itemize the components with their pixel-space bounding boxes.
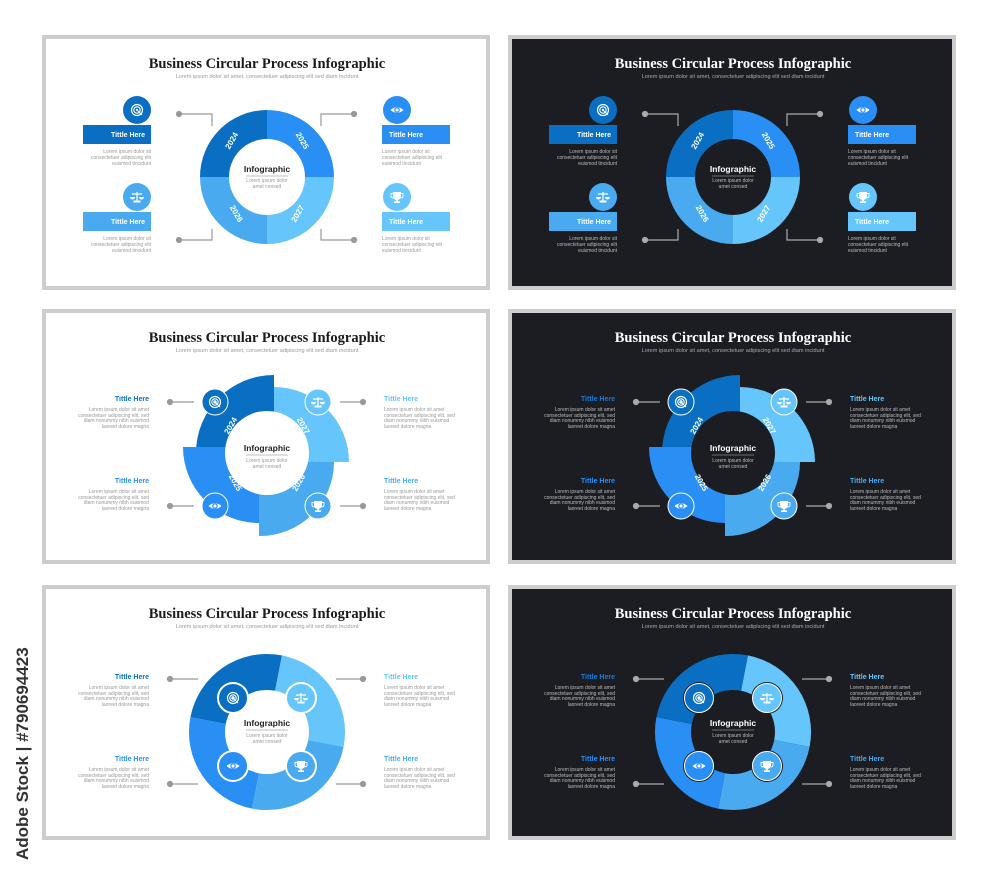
panel: light version 1 — [44, 37, 488, 288]
text: bottom right: Tittle Here — [850, 478, 884, 485]
text: top right: diam nonummy nibh euismod — [850, 418, 916, 424]
ring chart: Infographic — [710, 718, 756, 728]
ring chart: Lorem ipsum dolor — [712, 733, 754, 739]
text: top right: Tittle Here — [384, 396, 418, 403]
text: bottom left: Tittle Here — [581, 756, 615, 763]
item: top left: consectetuer adipiscing elit — [91, 155, 152, 161]
text: bottom left: laoreet dolore magna — [102, 784, 149, 790]
donut chart: 2025 — [294, 131, 311, 151]
text: top left: Lorem ipsum dolor sit amet — [89, 685, 150, 691]
text: top right: diam nonummy nibh euismod — [850, 696, 916, 702]
text: top right — [850, 674, 921, 708]
text: bottom left: Lorem ipsum dolor sit amet — [89, 767, 150, 773]
item: top right — [382, 96, 450, 167]
subtitle: Lorem ipsum dolor sit amet, consectetuer adipiscing elit sed diam incidunt — [642, 624, 825, 630]
item: bottom right: consectetuer adipiscing elit — [382, 242, 443, 248]
text: bottom left — [544, 756, 616, 790]
text: bottom left: diam nonummy nibh euismod — [550, 778, 615, 784]
text: bottom right: laoreet dolore magna — [850, 506, 897, 512]
donut chart: 2026 — [228, 204, 245, 224]
text: top right — [850, 396, 921, 430]
panel: dark version 1 — [510, 37, 954, 288]
ring chart: Lorem ipsum dolor — [246, 733, 288, 739]
text: bottom right: laoreet dolore magna — [384, 506, 431, 512]
text: top right: laoreet dolore magna — [384, 424, 431, 430]
connectors — [642, 112, 822, 242]
text: bottom left — [78, 478, 150, 512]
item: top right: consectetuer adipiscing elit — [848, 155, 909, 161]
text: bottom left: diam nonummy nibh euismod — [84, 500, 149, 506]
text: bottom right — [384, 756, 455, 790]
text: top right: consectetuer adipiscing elit, sed — [384, 413, 455, 419]
donut chart: amet consed — [253, 184, 282, 190]
text: top right: diam nonummy nibh euismod — [384, 696, 450, 702]
text: bottom right: consectetuer adipiscing elit, sed — [384, 495, 455, 501]
pinwheel chart: 2027 — [295, 416, 312, 436]
text: bottom right: Tittle Here — [850, 756, 884, 763]
subtitle: Lorem ipsum dolor sit amet, consectetuer adipiscing elit sed diam incidunt — [176, 348, 359, 354]
pinwheel chart: amet consed — [719, 464, 748, 470]
item: bottom right: Lorem ipsum dolor sit — [382, 236, 430, 242]
item: top right: Tittle Here — [855, 132, 889, 139]
text: top left: laoreet dolore magna — [102, 702, 149, 708]
text: bottom left: Tittle Here — [115, 478, 149, 485]
donut chart: 2025 — [760, 131, 777, 151]
item: bottom right: Lorem ipsum dolor sit — [848, 236, 896, 242]
item: top right: Lorem ipsum dolor sit — [382, 149, 430, 155]
text: bottom left: consectetuer adipiscing elit, sed — [544, 773, 615, 779]
text: top right: laoreet dolore magna — [850, 424, 897, 430]
item: bottom right: euismod tincidunt — [382, 248, 422, 254]
text: top left — [544, 674, 616, 708]
text: top right: Lorem ipsum dolor sit amet — [850, 685, 911, 691]
text: bottom right: consectetuer adipiscing elit, sed — [850, 773, 921, 779]
pinwheel chart: amet consed — [253, 464, 282, 470]
text: bottom right: diam nonummy nibh euismod — [850, 500, 916, 506]
text: top right — [384, 396, 455, 430]
icon circles — [202, 389, 331, 519]
pinwheel chart: 2024 — [222, 415, 239, 436]
text: top right: consectetuer adipiscing elit, sed — [384, 691, 455, 697]
text: bottom left: diam nonummy nibh euismod — [84, 778, 149, 784]
text: top left: diam nonummy nibh euismod — [84, 418, 149, 424]
text: top left: laoreet dolore magna — [568, 424, 615, 430]
text: top left: consectetuer adipiscing elit, sed — [78, 691, 149, 697]
text: top left — [78, 396, 150, 430]
item: bottom right — [382, 183, 450, 254]
text: bottom right: diam nonummy nibh euismod — [384, 500, 450, 506]
text: bottom right: Lorem ipsum dolor sit amet — [384, 767, 445, 773]
text: top left: Lorem ipsum dolor sit amet — [555, 407, 616, 413]
text: top left: laoreet dolore magna — [568, 702, 615, 708]
text: top left: diam nonummy nibh euismod — [550, 418, 615, 424]
item: top left: Tittle Here — [577, 132, 611, 139]
title: Business Circular Process Infographic — [149, 56, 386, 72]
donut chart: 2024 — [223, 130, 240, 151]
pinwheel chart: Lorem ipsum dolor — [246, 458, 288, 464]
text: bottom right — [850, 756, 921, 790]
text: bottom left: laoreet dolore magna — [568, 784, 615, 790]
donut chart: 2027 — [755, 203, 772, 224]
text: bottom right: Tittle Here — [384, 478, 418, 485]
item: bottom left: Tittle Here — [577, 219, 611, 226]
panel: light version 3 — [44, 587, 488, 838]
text: bottom right: diam nonummy nibh euismod — [850, 778, 916, 784]
text: top left: Lorem ipsum dolor sit amet — [89, 407, 150, 413]
donut chart: Infographic — [244, 164, 290, 174]
item: top left: Tittle Here — [111, 132, 145, 139]
item: top right: Lorem ipsum dolor sit — [848, 149, 896, 155]
text: bottom left: Tittle Here — [115, 756, 149, 763]
text: top right: Tittle Here — [850, 396, 884, 403]
item: top left: consectetuer adipiscing elit — [557, 155, 618, 161]
item: bottom left — [83, 183, 152, 254]
text: bottom right: consectetuer adipiscing elit, sed — [384, 773, 455, 779]
ring chart — [189, 654, 345, 810]
text: top left: Tittle Here — [115, 674, 149, 681]
text: top right: Lorem ipsum dolor sit amet — [384, 407, 445, 413]
text: bottom left: consectetuer adipiscing elit, sed — [78, 495, 149, 501]
pinwheel chart — [649, 375, 815, 536]
text: top left: Lorem ipsum dolor sit amet — [555, 685, 616, 691]
text: bottom left: consectetuer adipiscing elit, sed — [544, 495, 615, 501]
donut chart: Infographic — [710, 164, 756, 174]
donut chart: Lorem ipsum dolor — [712, 178, 754, 184]
item: top left: euismod tincidunt — [112, 161, 152, 167]
text: bottom left: laoreet dolore magna — [102, 506, 149, 512]
pinwheel chart: 2026 — [290, 472, 307, 493]
subtitle: Lorem ipsum dolor sit amet, consectetuer adipiscing elit sed diam incidunt — [176, 74, 359, 80]
pinwheel chart: 2025 — [693, 473, 710, 493]
text: bottom right: Lorem ipsum dolor sit amet — [850, 767, 911, 773]
item: bottom right: consectetuer adipiscing elit — [848, 242, 909, 248]
text: bottom left: laoreet dolore magna — [568, 506, 615, 512]
text: top right: laoreet dolore magna — [850, 702, 897, 708]
connectors — [168, 676, 366, 786]
text: top right: diam nonummy nibh euismod — [384, 418, 450, 424]
text: bottom right: Lorem ipsum dolor sit amet — [384, 489, 445, 495]
donut chart: amet consed — [719, 184, 748, 190]
text: bottom right: Lorem ipsum dolor sit amet — [850, 489, 911, 495]
item: top right: euismod tincidunt — [848, 161, 888, 167]
item: bottom left: Lorem ipsum dolor sit — [569, 236, 618, 242]
text: bottom left — [544, 478, 616, 512]
item: top right: consectetuer adipiscing elit — [382, 155, 443, 161]
item: bottom left: consectetuer adipiscing elit — [91, 242, 152, 248]
title: Business Circular Process Infographic — [615, 606, 852, 622]
title: Business Circular Process Infographic — [149, 330, 386, 346]
text: bottom left: Tittle Here — [581, 478, 615, 485]
item: bottom left: euismod tincidunt — [112, 248, 152, 254]
donut chart — [200, 110, 334, 244]
title: Business Circular Process Infographic — [149, 606, 386, 622]
icon circles — [218, 684, 316, 780]
text: top right: Lorem ipsum dolor sit amet — [384, 685, 445, 691]
pinwheel chart: 2027 — [761, 416, 778, 436]
item: bottom left: consectetuer adipiscing elit — [557, 242, 618, 248]
text: top left: Tittle Here — [115, 396, 149, 403]
item: bottom right: euismod tincidunt — [848, 248, 888, 254]
text: top right — [384, 674, 455, 708]
text: bottom left: diam nonummy nibh euismod — [550, 500, 615, 506]
connectors — [168, 400, 366, 508]
text: top left: consectetuer adipiscing elit, sed — [78, 413, 149, 419]
item: top left: Lorem ipsum dolor sit — [103, 149, 152, 155]
text: top left — [544, 396, 616, 430]
title: Business Circular Process Infographic — [615, 330, 852, 346]
text: top right: consectetuer adipiscing elit, sed — [850, 413, 921, 419]
subtitle: Lorem ipsum dolor sit amet, consectetuer adipiscing elit sed diam incidunt — [642, 74, 825, 80]
item: top right: euismod tincidunt — [382, 161, 422, 167]
text: bottom right — [850, 478, 921, 512]
donut chart: 2027 — [289, 203, 306, 224]
item: top right — [848, 96, 916, 167]
text: top left: diam nonummy nibh euismod — [84, 696, 149, 702]
text: bottom left: consectetuer adipiscing elit, sed — [78, 773, 149, 779]
text: top left: diam nonummy nibh euismod — [550, 696, 615, 702]
donut chart: 2024 — [689, 130, 706, 151]
pinwheel chart: 2025 — [227, 473, 244, 493]
text: bottom right: laoreet dolore magna — [850, 784, 897, 790]
text: top left: consectetuer adipiscing elit, sed — [544, 413, 615, 419]
connectors — [634, 400, 832, 508]
pinwheel chart: 2024 — [688, 415, 705, 436]
item: top left: Lorem ipsum dolor sit — [569, 149, 618, 155]
text: bottom right: Tittle Here — [384, 756, 418, 763]
panel: light version 2 — [44, 311, 488, 562]
pinwheel chart: Infographic — [244, 443, 290, 453]
text: bottom left — [78, 756, 150, 790]
panel: dark version 3 — [510, 587, 954, 838]
subtitle: Lorem ipsum dolor sit amet, consectetuer adipiscing elit sed diam incidunt — [176, 624, 359, 630]
text: top left: Tittle Here — [581, 396, 615, 403]
pinwheel chart — [183, 375, 349, 536]
pinwheel chart: Infographic — [710, 443, 756, 453]
text: top left: laoreet dolore magna — [102, 424, 149, 430]
watermark label: Adobe Stock: Adobe Stock | #790694423 — [13, 647, 32, 860]
text: top right: laoreet dolore magna — [384, 702, 431, 708]
text: bottom left: Lorem ipsum dolor sit amet — [555, 767, 616, 773]
ring chart — [655, 654, 811, 810]
text: top right: Lorem ipsum dolor sit amet — [850, 407, 911, 413]
text: top left: consectetuer adipiscing elit, sed — [544, 691, 615, 697]
item: bottom left: Tittle Here — [111, 219, 145, 226]
text: top left — [78, 674, 150, 708]
text: top right: Tittle Here — [850, 674, 884, 681]
ring chart: amet consed — [253, 739, 282, 745]
item: bottom left: Lorem ipsum dolor sit — [103, 236, 152, 242]
connectors — [176, 112, 356, 242]
item: top right: Tittle Here — [389, 132, 423, 139]
pinwheel chart: Lorem ipsum dolor — [712, 458, 754, 464]
title: Business Circular Process Infographic — [615, 56, 852, 72]
text: bottom left: Lorem ipsum dolor sit amet — [555, 489, 616, 495]
connectors — [634, 676, 832, 786]
item: top left: euismod tincidunt — [578, 161, 618, 167]
ring chart: Infographic — [244, 718, 290, 728]
item: bottom right — [848, 183, 916, 254]
text: bottom left: Lorem ipsum dolor sit amet — [89, 489, 150, 495]
ring chart: amet consed — [719, 739, 748, 745]
donut chart: Lorem ipsum dolor — [246, 178, 288, 184]
text: bottom right: laoreet dolore magna — [384, 784, 431, 790]
text: top right: Tittle Here — [384, 674, 418, 681]
item: bottom left: euismod tincidunt — [578, 248, 618, 254]
subtitle: Lorem ipsum dolor sit amet, consectetuer adipiscing elit sed diam incidunt — [642, 348, 825, 354]
text: bottom right — [384, 478, 455, 512]
donut chart — [666, 110, 800, 244]
item: bottom right: Tittle Here — [855, 219, 889, 226]
item: bottom right: Tittle Here — [389, 219, 423, 226]
icon circles — [668, 389, 797, 519]
panel: dark version 2 — [510, 311, 954, 562]
item: top left — [83, 96, 152, 167]
text: bottom right: consectetuer adipiscing elit, sed — [850, 495, 921, 501]
donut chart: 2026 — [694, 204, 711, 224]
item: bottom left — [549, 183, 618, 254]
text: bottom right: diam nonummy nibh euismod — [384, 778, 450, 784]
text: top right: consectetuer adipiscing elit, sed — [850, 691, 921, 697]
text: top left: Tittle Here — [581, 674, 615, 681]
icon circles — [684, 684, 782, 780]
item: top left — [549, 96, 618, 167]
pinwheel chart: 2026 — [756, 472, 773, 493]
